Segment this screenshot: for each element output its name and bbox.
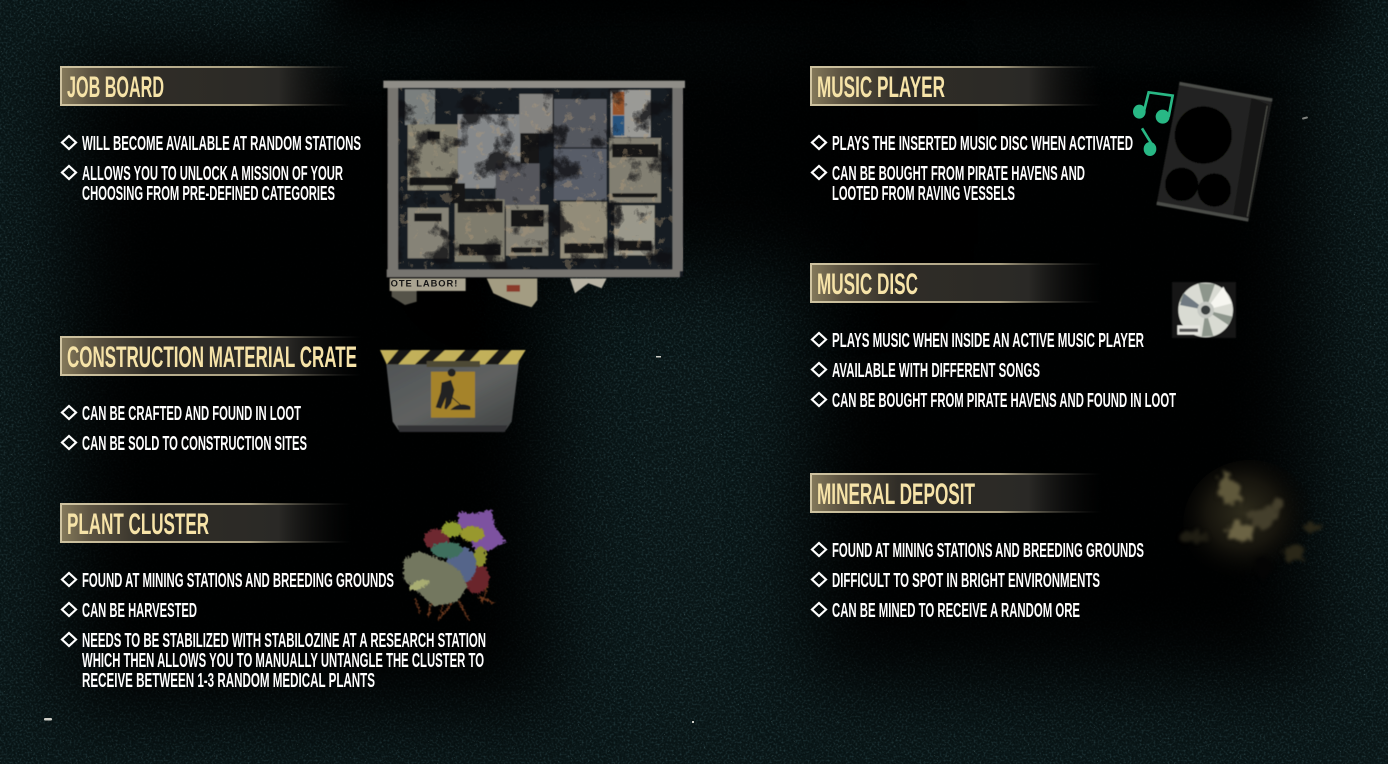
panel: job board bbox=[61, 67, 685, 307]
panel: plant cluster bbox=[61, 504, 507, 692]
bullet list: plant cluster: RECEIVE BETWEEN 1-3 RANDOM MEDICAL PLANTS bbox=[82, 670, 375, 692]
bullet list: job board: CHOOSING FROM PRE-DEFINED CATEGORIES bbox=[82, 183, 335, 205]
heading: job board bbox=[61, 67, 351, 105]
bullet list: plant cluster bbox=[62, 570, 486, 692]
bullet list: mineral deposit: DIFFICULT TO SPOT IN BRIGHT ENVIRONMENTS bbox=[832, 570, 1100, 592]
heading: music player bbox=[811, 67, 1101, 105]
image: job board bbox=[383, 81, 685, 307]
bullet list: music player bbox=[812, 133, 1133, 205]
bullet list: plant cluster: FOUND AT MINING STATIONS AND BREEDING GROUNDS bbox=[82, 570, 394, 592]
heading: construction material crate: CONSTRUCTION MATERIAL CRATE bbox=[67, 341, 357, 374]
bullet list: music disc bbox=[812, 330, 1176, 412]
bullet list: job board: WILL BECOME AVAILABLE AT RANDOM STATIONS bbox=[82, 133, 361, 155]
panel: mineral deposit bbox=[811, 460, 1324, 622]
panel: music disc bbox=[811, 264, 1236, 412]
bullet list: job board: ALLOWS YOU TO UNLOCK A MISSION OF YOUR bbox=[82, 163, 343, 185]
image: music player bbox=[1157, 83, 1272, 222]
bullet list: music player: LOOTED FROM RAVING VESSELS bbox=[832, 183, 1015, 205]
heading: construction material crate bbox=[61, 337, 361, 375]
image: mineral deposit bbox=[1179, 460, 1324, 587]
bullet list: plant cluster: NEEDS TO BE STABILIZED WITH STABILOZINE AT A RESEARCH STATION bbox=[82, 630, 486, 652]
icon: music notes bbox=[1133, 92, 1173, 156]
bullet list: crate: CAN BE CRAFTED AND FOUND IN LOOT bbox=[82, 403, 301, 425]
image: music disc bbox=[1172, 282, 1236, 338]
bullet list: crate bbox=[62, 403, 307, 455]
bullet list: music disc: PLAYS MUSIC WHEN INSIDE AN ACTIVE MUSIC PLAYER bbox=[832, 330, 1144, 352]
bullet list: plant cluster: CAN BE HARVESTED bbox=[82, 600, 197, 622]
heading: music disc bbox=[811, 264, 1101, 302]
bullet list: mineral deposit: FOUND AT MINING STATIONS AND BREEDING GROUNDS bbox=[832, 540, 1144, 562]
bullet list: music disc: AVAILABLE WITH DIFFERENT SONGS bbox=[832, 360, 1040, 382]
panel: construction material crate bbox=[61, 337, 526, 455]
bullet list: mineral deposit bbox=[812, 540, 1144, 622]
heading: plant cluster: PLANT CLUSTER bbox=[67, 508, 209, 541]
heading: mineral deposit: MINERAL DEPOSIT bbox=[817, 478, 975, 511]
bullet list: plant cluster: WHICH THEN ALLOWS YOU TO MANUALLY UNTANGLE THE CLUSTER TO bbox=[82, 650, 484, 672]
heading: job board: JOB BOARD bbox=[67, 71, 164, 104]
bullet list: job board bbox=[62, 133, 361, 205]
bullet list: music player: PLAYS THE INSERTED MUSIC DISC WHEN ACTIVATED bbox=[832, 133, 1133, 155]
bullet list: music player: CAN BE BOUGHT FROM PIRATE HAVENS AND bbox=[832, 163, 1085, 185]
bullet list: crate: CAN BE SOLD TO CONSTRUCTION SITES bbox=[82, 433, 307, 455]
heading: music disc: MUSIC DISC bbox=[817, 268, 918, 301]
image: plant cluster bbox=[403, 510, 507, 620]
heading: music player: MUSIC PLAYER bbox=[817, 71, 945, 104]
image: crate bbox=[380, 350, 526, 432]
panel: music player bbox=[811, 67, 1272, 222]
image: job board: OTE LABOR! bbox=[391, 279, 457, 289]
bullet list: mineral deposit: CAN BE MINED TO RECEIVE A RANDOM ORE bbox=[832, 600, 1080, 622]
grunge overlays bbox=[388, 88, 683, 271]
